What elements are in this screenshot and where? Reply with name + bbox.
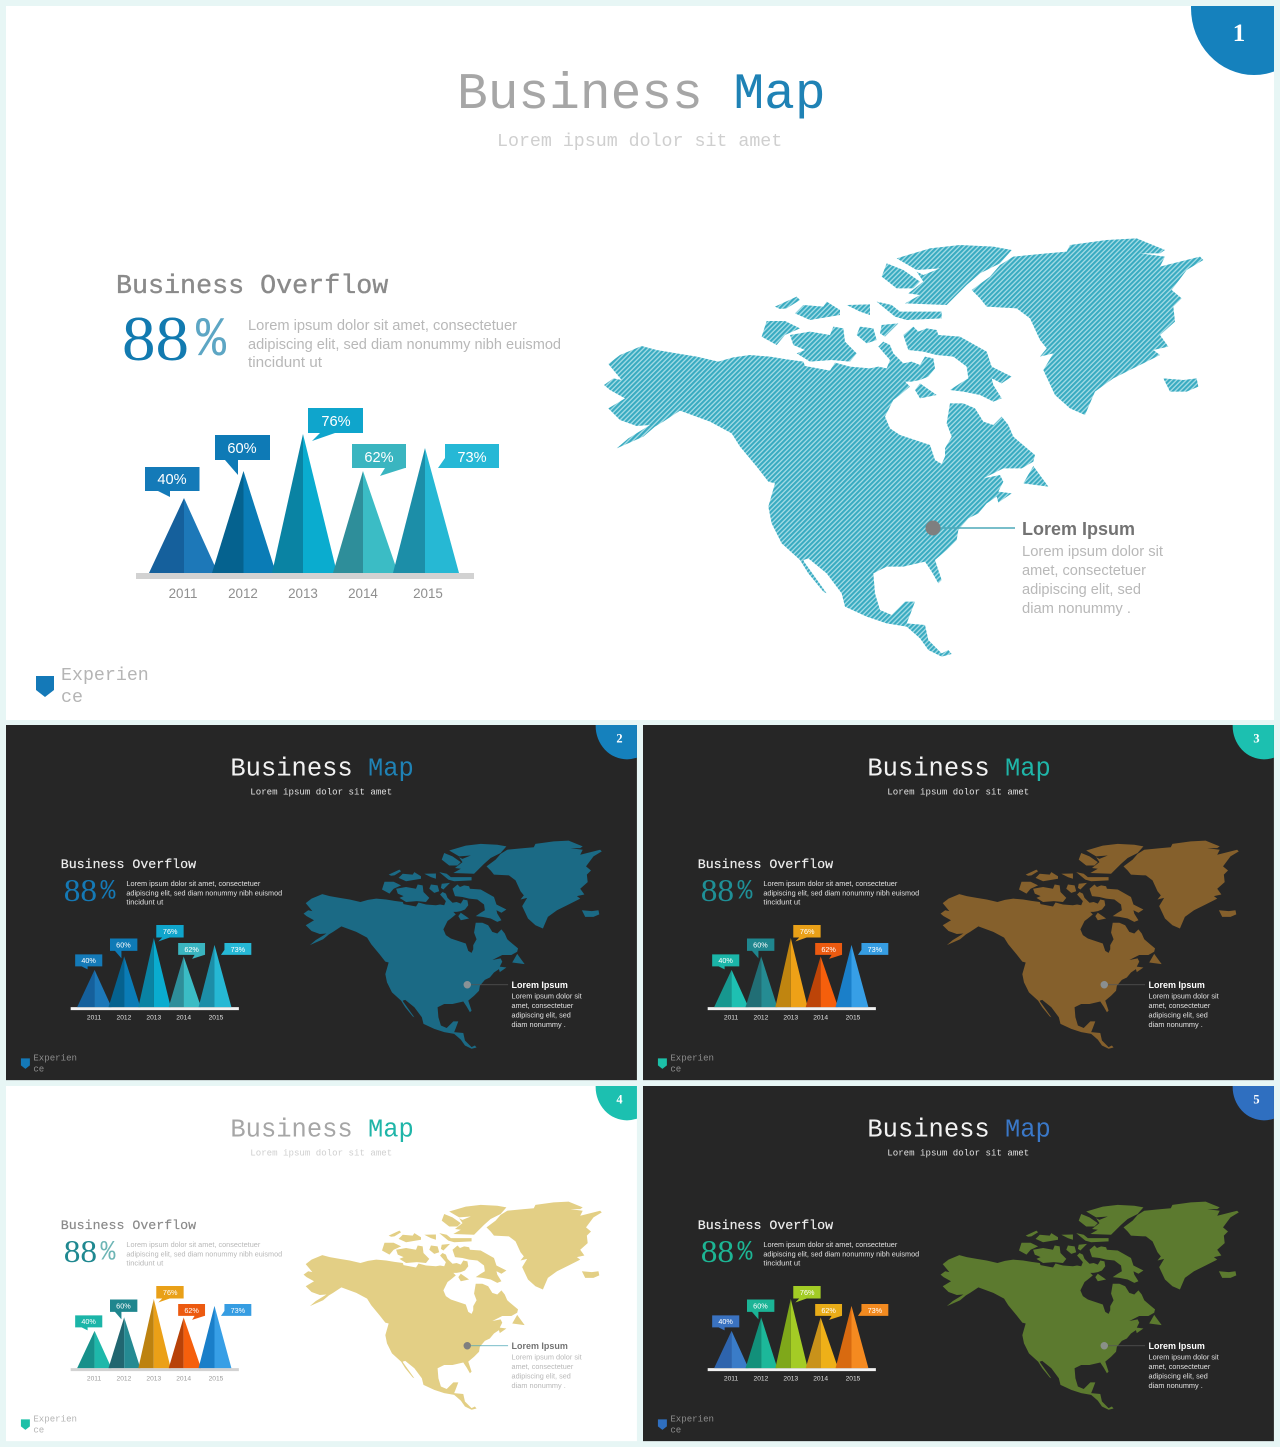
year labels: 2011	[87, 1376, 102, 1383]
slide 3 number badge: 3	[1253, 731, 1260, 745]
callout 62%	[815, 1304, 842, 1320]
year labels: 2013	[783, 1376, 798, 1383]
slide 5 88 percent stat: %	[738, 1238, 753, 1269]
slide 1 description: Lorem ipsum dolor sit amet, consectetuer	[248, 318, 517, 334]
slide 4 pin heading: Lorem Ipsum	[512, 1341, 568, 1351]
slide 1 logo: ce	[61, 688, 83, 708]
callout 40%: 40%	[718, 956, 733, 965]
slide 5 logo: ce	[670, 1424, 681, 1435]
callout 62%: 62%	[184, 945, 199, 954]
slide 2 map pin	[464, 981, 508, 988]
slide 4 description: Lorem ipsum dolor sit amet, consectetuer	[126, 1241, 261, 1249]
slide 3 map pin	[1101, 981, 1145, 988]
slide 1 triangle chart	[136, 408, 499, 601]
panel: slide 1	[6, 0, 1280, 720]
slide 2 pin text: amet, consectetuer	[512, 1002, 574, 1010]
slide 5 background	[643, 1086, 1274, 1441]
callout 40%: 40%	[718, 1317, 733, 1326]
slide 2 pin text: Lorem ipsum dolor sit	[512, 993, 582, 1001]
slide 1 number badge: 1	[1233, 20, 1245, 47]
slide 3 pin heading: Lorem Ipsum	[1149, 980, 1205, 990]
slide 2 background	[6, 725, 637, 1080]
slide 2 description: adipiscing elit, sed diam nonummy nibh euismod	[126, 890, 282, 898]
slide 3 description: adipiscing elit, sed diam nonummy nibh euismod	[763, 890, 919, 898]
year labels: 2012	[117, 1376, 132, 1383]
year labels: 2013	[783, 1015, 798, 1022]
year labels: 2011	[169, 586, 197, 601]
callout 60%: 60%	[753, 940, 768, 949]
slide 5 logo: Experien	[670, 1413, 714, 1424]
year labels: 2011	[87, 1015, 102, 1022]
slide 3 logo: ce	[670, 1063, 681, 1074]
panel: slide 4	[6, 1054, 658, 1441]
callout 40%	[75, 1315, 102, 1330]
year labels: 2012	[228, 586, 258, 601]
callout 60%: 60%	[227, 441, 257, 457]
year labels	[724, 1376, 861, 1383]
slide 5 description: Lorem ipsum dolor sit amet, consectetuer	[763, 1241, 898, 1249]
slide 2 88 percent stat: %	[101, 877, 116, 908]
slide 5 triangle chart	[708, 1286, 888, 1383]
callout 73%: 73%	[868, 945, 883, 954]
slide 4 pin text: amet, consectetuer	[512, 1363, 574, 1371]
slide 3 pin text: amet, consectetuer	[1149, 1002, 1211, 1010]
slide 2 triangle chart	[71, 925, 251, 1022]
callout 40%: 40%	[81, 1317, 96, 1326]
callout 73%	[858, 1304, 888, 1316]
slide 3 88 percent stat	[701, 873, 753, 908]
slide 1 logo: Experien	[61, 666, 149, 686]
callout 76%	[156, 1286, 184, 1302]
callout 60%	[110, 1299, 137, 1319]
callout 62%	[352, 444, 406, 476]
slide 4 pin text: Lorem ipsum dolor sit	[512, 1354, 582, 1362]
callout 76%: 76%	[163, 1288, 178, 1297]
year labels: 2014	[176, 1376, 191, 1383]
slide 3 logo: Experien	[670, 1052, 714, 1063]
slide 4 number badge	[596, 1054, 658, 1120]
year labels	[87, 1376, 224, 1383]
slide 4 section heading: Business Overflow	[61, 1218, 196, 1233]
slide 4 logo	[21, 1413, 77, 1435]
slide 2 pin heading: Lorem Ipsum	[512, 980, 568, 990]
slide 1 logo	[36, 666, 148, 702]
slide 2 logo: Experien	[33, 1052, 77, 1063]
callout 73%	[438, 444, 499, 468]
year labels: 2013	[146, 1015, 161, 1022]
slide 1 background	[6, 6, 1274, 720]
slide 5 title: Business Map	[867, 1116, 1051, 1145]
callout 62%: 62%	[184, 1306, 199, 1315]
year labels: 2011	[724, 1376, 739, 1383]
callout 60%: 60%	[753, 1301, 768, 1310]
slide 4 logo: Experien	[33, 1413, 77, 1424]
slide 5 pin text: diam nonummy .	[1149, 1382, 1203, 1390]
callout 62%	[815, 943, 842, 959]
slide 4 88 percent stat: 88	[64, 1234, 97, 1269]
slide 2 title: Business Map	[230, 755, 414, 784]
slide 3 subtitle: Lorem ipsum dolor sit amet	[887, 787, 1029, 798]
slide 5 description: adipiscing elit, sed diam nonummy nibh euismod	[763, 1251, 919, 1259]
callout 62%: 62%	[364, 450, 394, 466]
slide 2 description: Lorem ipsum dolor sit amet, consectetuer	[126, 880, 261, 888]
slide 2 pin text: adipiscing elit, sed	[512, 1012, 571, 1020]
slide 1 88 percent stat: 88	[122, 303, 189, 374]
year labels: 2015	[846, 1015, 861, 1022]
slide 2 88 percent stat: 88	[64, 873, 97, 908]
callout 40%: 40%	[81, 956, 96, 965]
panel: slide 3	[643, 693, 1280, 1080]
panel: slide 2	[6, 725, 637, 1080]
slide 5 number badge	[1233, 1054, 1280, 1120]
slide 3 pin text: adipiscing elit, sed	[1149, 1012, 1208, 1020]
callout 76%	[308, 408, 363, 441]
slide 3 description: tincidunt ut	[763, 899, 800, 907]
year labels: 2012	[754, 1015, 769, 1022]
callout 62%: 62%	[821, 1306, 836, 1315]
panel: slide 5	[643, 1054, 1280, 1441]
year labels: 2014	[813, 1015, 828, 1022]
slide 5 88 percent stat: 88	[701, 1234, 734, 1269]
callout 76%	[793, 1286, 821, 1302]
slide 1 pin text: diam nonummy .	[1022, 601, 1131, 617]
slide 4 title: Business Map	[230, 1116, 414, 1145]
slide 1 description: tincidunt ut	[248, 355, 322, 371]
slide 5 description: tincidunt ut	[763, 1260, 800, 1268]
callout 73%: 73%	[231, 1306, 246, 1315]
slide 2 number badge: 2	[616, 731, 623, 745]
callout 60%	[110, 938, 137, 958]
year labels: 2015	[846, 1376, 861, 1383]
slide 1 pin text: adipiscing elit, sed	[1022, 582, 1141, 598]
slide 4 description: adipiscing elit, sed diam nonummy nibh euismod	[126, 1251, 282, 1259]
slide 3 pin text: diam nonummy .	[1149, 1021, 1203, 1029]
callout 60%	[747, 938, 774, 958]
slide 5 pin text: adipiscing elit, sed	[1149, 1373, 1208, 1381]
callout 76%: 76%	[800, 1288, 815, 1297]
callout 60%	[215, 435, 270, 475]
callout 76%: 76%	[321, 414, 351, 430]
slide 5 pin text: amet, consectetuer	[1149, 1363, 1211, 1371]
slide 2 section heading: Business Overflow	[61, 857, 196, 872]
slide 5 map	[941, 1202, 1239, 1410]
callout 73%: 73%	[868, 1306, 883, 1315]
slide 3 logo	[658, 1052, 714, 1074]
slide 2 map	[304, 841, 602, 1049]
slide 1 pin heading: Lorem Ipsum	[1022, 519, 1135, 539]
callout 76%: 76%	[163, 927, 178, 936]
slide 1 subtitle: Lorem ipsum dolor sit amet	[497, 132, 782, 152]
slide 2 logo	[20, 1054, 76, 1072]
slide 2 subtitle: Lorem ipsum dolor sit amet	[250, 787, 392, 798]
slide 4 background	[6, 1086, 637, 1441]
year labels: 2014	[348, 586, 378, 601]
year labels: 2012	[754, 1376, 769, 1383]
slide 2 logo: ce	[33, 1063, 44, 1074]
slide 4 number badge: 4	[616, 1092, 623, 1106]
slide 1 title: Business Map	[457, 66, 826, 124]
year labels: 2015	[209, 1376, 224, 1383]
slide 5 number badge: 5	[1253, 1092, 1260, 1106]
year labels: 2014	[176, 1015, 191, 1022]
slide 4 subtitle: Lorem ipsum dolor sit amet	[250, 1148, 392, 1159]
callout 73%	[221, 1304, 251, 1316]
callout 60%: 60%	[116, 1301, 131, 1310]
year labels	[87, 1015, 223, 1020]
slide 5 88 percent stat	[701, 1234, 753, 1269]
slide 3 title: Business Map	[867, 755, 1051, 784]
year labels: 2014	[813, 1376, 828, 1383]
slide 1 88 percent stat: %	[196, 308, 226, 372]
slide 3 triangle chart	[708, 925, 888, 1022]
slide 5 subtitle: Lorem ipsum dolor sit amet	[887, 1148, 1029, 1159]
callout 62%	[178, 943, 205, 959]
slide 4 pin text: adipiscing elit, sed	[512, 1373, 571, 1381]
callout 62%: 62%	[821, 945, 836, 954]
slide 3 pin text: Lorem ipsum dolor sit	[1149, 993, 1219, 1001]
callout 76%: 76%	[800, 927, 815, 936]
slide 3 map	[941, 841, 1239, 1049]
callout 76%	[156, 925, 184, 941]
callout 73%	[858, 943, 888, 955]
callout 73%	[221, 943, 251, 955]
slide 3 description: Lorem ipsum dolor sit amet, consectetuer	[763, 880, 898, 888]
slide 4 88 percent stat: %	[101, 1238, 116, 1269]
year labels: 2011	[724, 1015, 739, 1022]
callout 40%: 40%	[157, 472, 187, 488]
year labels: 2012	[117, 1015, 132, 1022]
slide 4 description: tincidunt ut	[126, 1260, 163, 1268]
slide 1 88 percent stat	[124, 318, 226, 360]
slide 4 map pin	[464, 1342, 508, 1349]
callout 40%	[145, 467, 200, 497]
slide 4 pin text: diam nonummy .	[512, 1382, 566, 1390]
callout 40%	[712, 1315, 739, 1330]
callout 62%	[178, 1304, 205, 1320]
year labels: 2013	[146, 1376, 161, 1383]
callout 73%: 73%	[231, 945, 246, 954]
callout 73%: 73%	[457, 450, 487, 466]
slide 2 pin text: diam nonummy .	[512, 1021, 566, 1029]
slide 3 number badge	[1233, 693, 1280, 759]
slide 3 88 percent stat: 88	[701, 873, 734, 908]
slide 4 map	[304, 1202, 602, 1410]
year labels: 2015	[209, 1015, 224, 1022]
slide 1 hatched North America map	[604, 238, 1203, 657]
slide 1 pin text: Lorem ipsum dolor sit	[1022, 544, 1163, 560]
slide 1 pin text: amet, consectetuer	[1022, 563, 1146, 579]
slide 2 88 percent stat	[65, 880, 116, 902]
slide 5 section heading: Business Overflow	[698, 1218, 833, 1233]
slide 1 description: adipiscing elit, sed diam nonummy nibh euismod	[248, 337, 561, 353]
slide 3 background	[643, 725, 1274, 1080]
slide 3 88 percent stat: %	[738, 877, 753, 908]
slide 1 section heading: Business Overflow	[116, 272, 388, 302]
callout 76%	[793, 925, 821, 941]
slide 4 triangle chart	[71, 1286, 251, 1383]
slide 2 number badge	[596, 725, 637, 760]
slide 5 logo	[658, 1413, 714, 1435]
slide 5 pin text: Lorem ipsum dolor sit	[1149, 1354, 1219, 1362]
slide 1 number badge	[1191, 6, 1274, 75]
callout 40%	[75, 954, 102, 969]
slide 3 section heading: Business Overflow	[698, 857, 833, 872]
slide 1 map pin	[926, 520, 1015, 536]
year labels: 2013	[288, 586, 318, 601]
callout 60%: 60%	[116, 940, 131, 949]
slide 4 88 percent stat	[64, 1234, 116, 1269]
year labels: 2015	[413, 586, 443, 601]
slide 4 logo: ce	[33, 1424, 44, 1435]
year labels	[724, 1015, 861, 1022]
callout 40%	[712, 954, 739, 969]
slide 2 description: tincidunt ut	[126, 899, 163, 907]
year labels	[169, 588, 442, 598]
slide 5 pin heading: Lorem Ipsum	[1149, 1341, 1205, 1351]
slide 5 map pin	[1101, 1342, 1145, 1349]
callout 60%	[747, 1299, 774, 1319]
